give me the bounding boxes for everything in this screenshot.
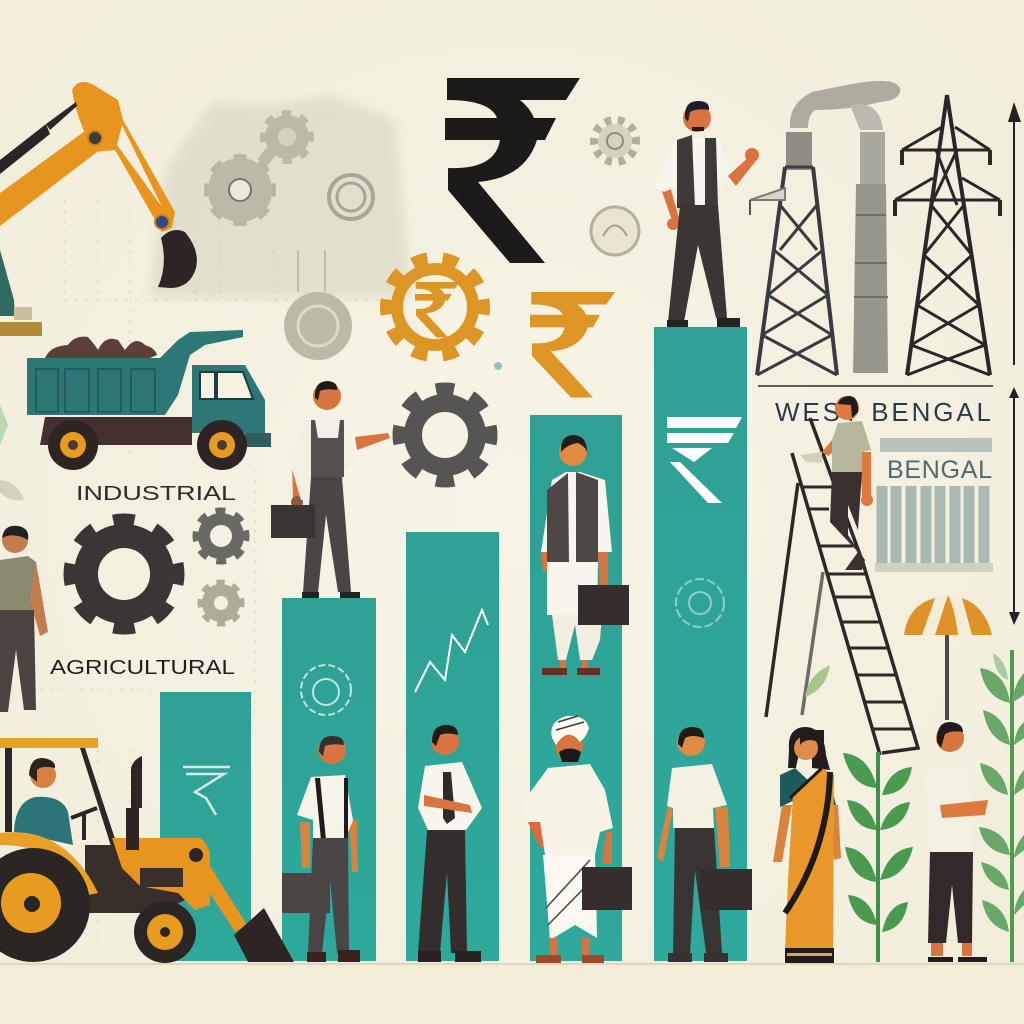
arrows: right edge [1008, 102, 1021, 625]
person: man with vest on bar 4 [541, 435, 629, 675]
icon: small grey gear coins [591, 120, 639, 255]
bar 1 [160, 692, 251, 961]
bar 5 [654, 327, 747, 961]
label: BENGAL building sign: BENGAL [887, 456, 992, 484]
person: left standing man [0, 526, 48, 712]
icon: dump truck [27, 330, 271, 470]
icon: small leaf by ladder [805, 665, 830, 697]
person: overalls man on bar 2 [271, 381, 390, 598]
person: man in cream shirt with briefcase [657, 727, 752, 962]
icon: small dot [494, 362, 502, 370]
building: West Bengal [875, 438, 993, 572]
person: man with tie [418, 725, 482, 962]
person: woman in saree [773, 727, 841, 963]
person: suspenders man [282, 736, 360, 962]
label: INDUSTRIAL: INDUSTRIAL [76, 482, 236, 505]
icon: dark gear centre [399, 389, 491, 481]
person: man on ladder [800, 396, 873, 570]
bar 2 [282, 598, 376, 961]
bar 4 [530, 415, 622, 961]
icon: plant centre right [843, 752, 913, 962]
label: WEST BENGAL: WEST BENGAL [775, 397, 991, 427]
icon: pylon left [750, 167, 837, 375]
icon: smoke and chimneys [786, 81, 900, 373]
icon: left gears [71, 511, 246, 627]
person: man standing on bar 5 [653, 101, 759, 327]
icon: orange rupee gear [386, 258, 484, 356]
icon: excavator arm [0, 82, 197, 336]
icon: large rupee symbol [445, 78, 580, 263]
divider: line [758, 385, 993, 387]
icon: orange rupee symbol [530, 292, 615, 397]
icon: grey coin [284, 250, 352, 360]
icon: pylon right [895, 95, 1000, 375]
person: turbaned man with dhoti [520, 716, 632, 963]
icon: left edge leaves [0, 405, 24, 500]
icon: umbrella [904, 595, 992, 720]
bar 3 [406, 532, 499, 961]
icon: plant right edge [979, 650, 1024, 962]
person: man arms crossed [923, 722, 988, 962]
gear group: upper grey gears [209, 114, 373, 221]
icon: tractor [0, 738, 294, 963]
label: AGRICULTURAL: AGRICULTURAL [50, 656, 235, 679]
icon: ladder [766, 418, 918, 755]
ground line [0, 963, 1024, 965]
